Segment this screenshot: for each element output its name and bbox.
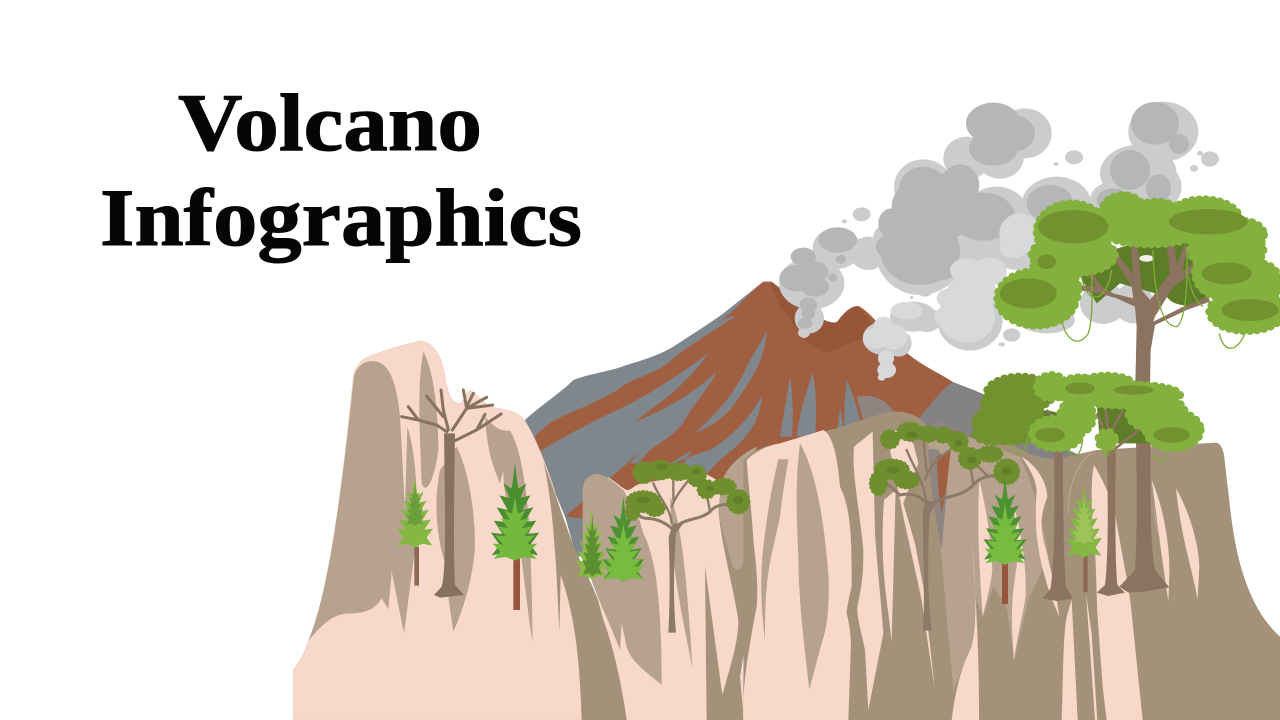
title <box>100 77 582 263</box>
pine tree 3 <box>576 508 607 579</box>
left cliff <box>293 341 627 720</box>
right cliff <box>743 412 1280 720</box>
pine tree 6 <box>1066 483 1102 592</box>
dead tree <box>402 390 501 598</box>
lower rainforest trees <box>975 375 1201 601</box>
pine tree 5 <box>983 477 1027 604</box>
title: Volcano <box>178 77 482 168</box>
pine tree 4 <box>602 497 644 582</box>
acacia tree 2 <box>871 424 1018 631</box>
pine tree 1 <box>397 477 433 586</box>
title: Infographics <box>100 172 582 263</box>
big rainforest tree <box>997 195 1280 383</box>
middle cliff <box>583 447 757 720</box>
volcano <box>525 282 1090 570</box>
pine tree 2 <box>491 463 539 610</box>
acacia tree 1 <box>627 462 748 633</box>
smoke <box>779 102 1219 381</box>
